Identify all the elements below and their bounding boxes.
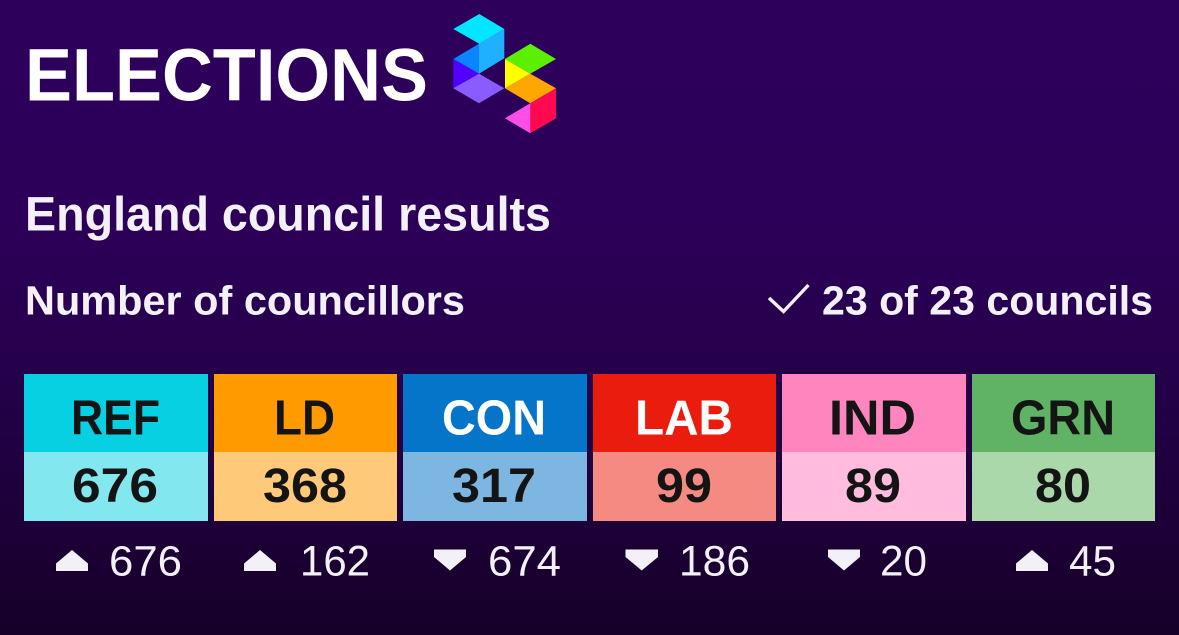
party: GRN: GRN xyxy=(1011,392,1115,446)
icon: check mark xyxy=(769,285,808,312)
party: IND xyxy=(782,374,966,586)
party: LAB xyxy=(593,374,776,586)
party: REF: REF xyxy=(71,392,160,446)
subheading: Number of councillors: Number of councillors xyxy=(25,278,465,324)
party: LD: LD xyxy=(274,392,335,446)
party: LAB: 186 xyxy=(679,538,750,586)
heading: England council results: England council results xyxy=(25,188,551,242)
party: GRN xyxy=(972,374,1155,586)
party: GRN: 45 xyxy=(1069,538,1116,586)
party: IND: IND xyxy=(829,392,916,446)
party: LAB: LAB xyxy=(635,392,733,446)
party: IND: 89 xyxy=(845,460,901,513)
party: GRN: 80 xyxy=(1035,460,1091,513)
text: 23 of 23 councils: 23 of 23 councils xyxy=(822,278,1153,324)
icon: elections cube logo xyxy=(453,14,556,133)
title: ELECTIONS: ELECTIONS xyxy=(25,34,428,116)
party: LAB: 99 xyxy=(656,460,712,513)
party: CON xyxy=(403,374,587,586)
party: LD xyxy=(214,374,397,586)
party: IND: 20 xyxy=(880,538,927,586)
party: CON: 674 xyxy=(488,538,561,586)
party: REF xyxy=(24,374,208,586)
party: CON: CON xyxy=(442,392,546,446)
party: LD: 162 xyxy=(300,538,370,586)
party: LD: 368 xyxy=(263,460,347,513)
party: CON: 317 xyxy=(452,460,536,513)
party: REF: 676 xyxy=(72,460,158,513)
status: councils declared xyxy=(769,278,1153,324)
party: REF: 676 xyxy=(109,538,182,586)
